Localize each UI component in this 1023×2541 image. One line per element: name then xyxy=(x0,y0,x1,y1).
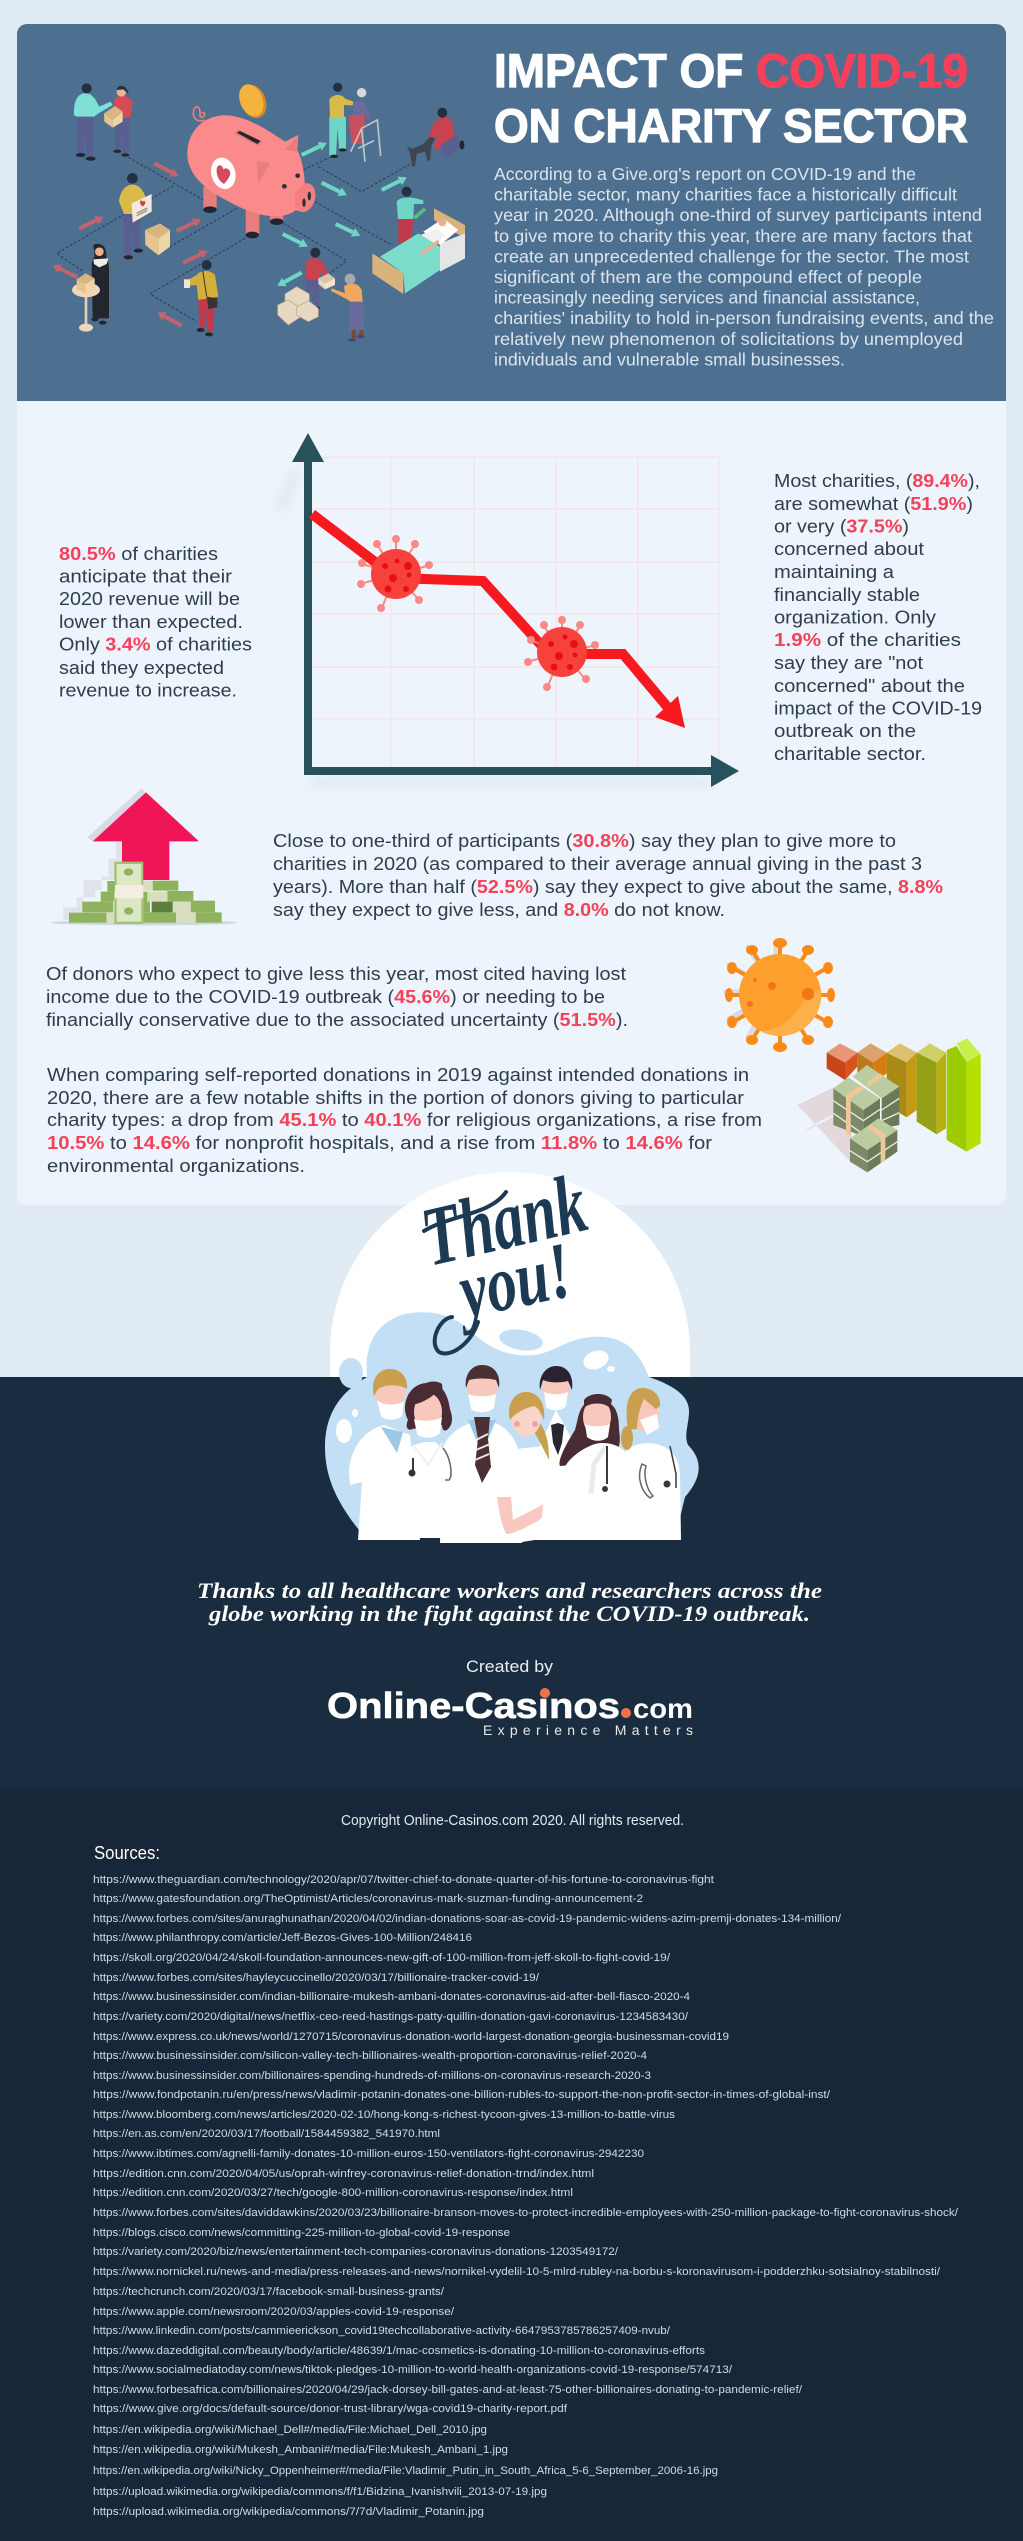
text block: intro: According to a Give.org's report on COVID-19 and the xyxy=(494,164,916,184)
text block: intro: year in 2020. Although one-third of survey participants intend xyxy=(494,205,982,225)
panel: thanks footer xyxy=(0,1157,1023,1787)
icon: virus xyxy=(525,617,598,690)
text block: revenue expectation: Only 3.4% of charities xyxy=(59,635,252,655)
text block: concern: financially stable xyxy=(774,585,920,605)
arrows: teal xyxy=(283,146,400,282)
icon: virus xyxy=(358,536,432,611)
person: nun with donation box xyxy=(72,244,109,332)
text block: charity types: environmental organizations. xyxy=(47,1156,305,1176)
text block: concern: are somewhat ( 51.9% ) xyxy=(774,494,973,514)
text block: reasons for giving less: financially conservative due to the associated uncertainty ( 51.5% ). xyxy=(46,1010,628,1030)
text block: concern: charitable sector. xyxy=(774,744,926,764)
list: source links: https://www.dazeddigital.com/beauty/body/article/48639/1/mac-cosmetics-is-donating-10-million-to-coronavirus-efforts xyxy=(93,2345,705,2357)
icon: money pile with up arrow xyxy=(51,788,238,925)
logo: Online-Casinos.com: Experience Matters xyxy=(483,1722,693,1738)
icon: piggy bank xyxy=(187,107,318,238)
text block: giving plans: charities in 2020 (as compared to their average annual giving in the past 3 xyxy=(273,854,922,874)
logo: Online-Casinos.com: com xyxy=(633,1693,693,1724)
list: source links: https://www.linkedin.com/posts/cammieerickson_covid19techcollaborative-activity-6647953785786257409-nvub/ xyxy=(93,2325,671,2337)
panel: header xyxy=(17,24,1006,401)
text block: thanks message xyxy=(197,1578,822,1626)
list: source links: https://blogs.cisco.com/news/committing-225-million-to-global-covid-19-response xyxy=(93,2227,510,2239)
doctor 2 xyxy=(384,1381,455,1538)
doctor 1 xyxy=(349,1369,420,1540)
lettering: thank you: you! xyxy=(445,1226,579,1337)
list: source links: https://www.businessinsider.com/indian-billionaire-mukesh-ambani-donates-coronavirus-aid-after-bell-fiasco-2020-4 xyxy=(93,1991,690,2003)
list: source links: https://www.theguardian.com/technology/2020/apr/07/twitter-chief-to-donate-quarter-of-his-fortune-to-coronavirus-fight xyxy=(93,1874,715,1886)
list: source links: https://www.bloomberg.com/news/articles/2020-02-10/hong-kong-s-richest-tycoon-gives-13-million-to-battle-virus xyxy=(93,2109,675,2121)
text: created by: Created by xyxy=(466,1657,554,1676)
text block: concern: organization. Only xyxy=(774,608,936,628)
text block: revenue expectation: lower than expected. xyxy=(59,612,243,632)
text block: intro: relatively new phenomenon of solicitations by unemployed xyxy=(494,329,963,349)
text block: charity types xyxy=(47,1065,762,1176)
person: volunteer in red trousers xyxy=(184,260,218,336)
panel: sources footer xyxy=(0,1787,1023,2541)
text block: reasons for giving less: income due to the COVID-19 outbreak ( 45.6% ) or needing to be xyxy=(46,987,605,1007)
title: ON CHARITY SECTOR xyxy=(494,99,968,152)
lettering: thank you xyxy=(413,1157,595,1353)
doctor 4 xyxy=(486,1392,563,1542)
text block: concern: concerned" about the xyxy=(774,676,965,696)
list: source links: https://www.nornickel.ru/news-and-media/press-releases-and-news/nornikel-vydelil-10-5-mlrd-rubley-na-borbu-s-koronavirusom-i-podderzhku-sotsialnoy-stabilnosti/ xyxy=(93,2266,941,2278)
panel: findings xyxy=(17,401,1006,1205)
text block: concern: impact of the COVID-19 xyxy=(774,699,982,719)
text block: charity types: When comparing self-reported donations in 2019 against intended donations in xyxy=(47,1065,749,1085)
person: two figures with box xyxy=(74,83,133,161)
logo: Online-Casinos.com: Online-Casinos xyxy=(327,1685,620,1726)
doctor 3 xyxy=(440,1365,522,1543)
text block: revenue expectation xyxy=(59,544,252,701)
list: source links: https://www.businessinsider.com/billionaires-spending-hundreds-of-millions-on-coronavirus-research-2020-3 xyxy=(93,2070,651,2082)
icon: coin xyxy=(235,81,271,122)
illustration: doctors xyxy=(325,1312,699,1543)
list: source links: https://www.gatesfoundation.org/TheOptimist/Articles/coronavirus-mark-suzman-funding-announcement-2 xyxy=(93,1893,643,1905)
illustration: piggy bank charity network xyxy=(57,81,465,342)
list: source links: https://en.wikipedia.org/wiki/Michael_Dell#/media/File:Michael_Dell_2010.jpg xyxy=(93,2424,487,2436)
title: IMPACT OF COVID-19 xyxy=(494,44,968,97)
text: copyright: Copyright Online-Casinos.com 2020. All rights reserved. xyxy=(341,1812,684,1829)
title xyxy=(494,44,968,152)
text block: revenue expectation: revenue to increase. xyxy=(59,681,237,701)
text block: concern: maintaining a xyxy=(774,562,895,582)
stack of cash: back xyxy=(853,1065,899,1128)
lettering: thank you: Thank xyxy=(413,1157,595,1285)
text block: concern: concerned about xyxy=(774,539,924,559)
text block: intro: create an unprecedented challenge for the sector. The most xyxy=(494,246,969,266)
axes xyxy=(292,433,739,787)
trend arrow xyxy=(312,514,685,728)
text block: intro: to give more to charity this year, there are many factors that xyxy=(494,226,972,246)
text block: intro: significant of them are the compound effect of people xyxy=(494,267,922,287)
text block: charity types: 10.5% to 14.6% for nonprofit hospitals, and a rise from 11.8% to 14.6% for xyxy=(47,1133,712,1153)
arrows: pink xyxy=(60,163,201,326)
text block: concern xyxy=(774,471,982,764)
text block: charity types: charity types: a drop from 45.1% to 40.1% for religious organizations, a rise from xyxy=(47,1110,762,1130)
icon: hospital bed with patient and nurse xyxy=(372,187,465,294)
list: source links: https://www.forbes.com/sites/daviddawkins/2020/03/23/billionaire-branson-moves-to-protect-incredible-employees-with-250-million-package-to-fight-coronavirus-shock/ xyxy=(93,2207,959,2219)
text block: concern: 1.9% of the charities xyxy=(774,630,961,650)
text block: intro xyxy=(494,164,994,369)
text block: concern: Most charities, ( 89.4% ), xyxy=(774,471,980,491)
list: source links: https://upload.wikimedia.org/wikipedia/commons/7/7d/Vladimir_Potanin.jpg xyxy=(93,2506,484,2518)
list: source links: https://www.forbes.com/sites/anuraghunathan/2020/04/02/indian-donations-soar-as-covid-19-pandemic-widens-azim-premji-donates-134-million/ xyxy=(93,1913,842,1925)
heading: sources: Sources: xyxy=(94,1843,160,1863)
list: source links: https://www.give.org/docs/default-source/donor-trust-library/wga-covid19-charity-report.pdf xyxy=(93,2403,568,2415)
text block: intro: charitable sector, many charities face a historically difficult xyxy=(494,185,957,205)
list: source links: https://www.fondpotanin.ru/en/press/news/vladimir-potanin-donates-one-billion-rubles-to-support-the-non-profit-sector-in-times-of-global-inst/ xyxy=(93,2089,831,2101)
person: carer with elderly woman and walker xyxy=(329,83,381,162)
list: source links: https://upload.wikimedia.org/wikipedia/commons/f/f1/Bidzina_Ivanishvili_2013-07-19.jpg xyxy=(93,2486,547,2498)
doctor 5 xyxy=(535,1366,585,1540)
logo: Online-Casinos.com xyxy=(327,1685,693,1738)
white circle backdrop xyxy=(330,1172,690,1377)
list: source links: https://techcrunch.com/2020/03/17/facebook-small-business-grants/ xyxy=(93,2286,445,2298)
list: source links: https://www.forbes.com/sites/hayleycuccinello/2020/03/17/billionaire-tracker-covid-19/ xyxy=(93,1972,540,1984)
person: volunteer with dog xyxy=(407,108,464,167)
text block: revenue expectation: 80.5% of charities xyxy=(59,544,218,564)
text block: reasons for giving less: Of donors who expect to give less this year, most cited having lost xyxy=(46,964,626,984)
text block: reasons for giving less xyxy=(46,964,628,1030)
text block: giving plans: years). More than half ( 52.5% ) say they expect to give about the same, 8.8% xyxy=(273,877,943,897)
stack of cash: middle xyxy=(833,1077,880,1137)
icon: bars with stacks of cash xyxy=(797,1038,981,1172)
doctor 6 xyxy=(559,1394,637,1540)
list: source links: https://www.businessinsider.com/silicon-valley-tech-billionaires-wealth-proportion-coronavirus-relief-2020-4 xyxy=(93,2050,647,2062)
doctor 7 xyxy=(621,1388,681,1540)
list: source links: https://variety.com/2020/digital/news/netflix-ceo-reed-hastings-patty-quillin-donation-gavi-coronavirus-1234583430/ xyxy=(93,2011,689,2023)
list: source links: https://edition.cnn.com/2020/04/05/us/oprah-winfrey-coronavirus-relief-donation-trnd/index.html xyxy=(93,2168,594,2180)
icon: orange virus xyxy=(725,938,835,1052)
text block: concern: outbreak on the xyxy=(774,721,916,741)
list: source links: https://www.philanthropy.com/article/Jeff-Bezos-Gives-100-Million/248416 xyxy=(93,1932,472,1944)
list: source links: https://www.apple.com/newsroom/2020/03/apples-covid-19-response/ xyxy=(93,2306,455,2318)
text block: giving plans: say they expect to give less, and 8.0% do not know. xyxy=(273,900,725,920)
text block: intro: individuals and vulnerable small businesses. xyxy=(494,349,845,369)
list: source links: https://en.wikipedia.org/wiki/Nicky_Oppenheimer#/media/File:Vladimir_Putin_in_South_Africa_5-6_September_2006-16.jpg xyxy=(93,2465,718,2477)
text block: concern: or very ( 37.5% ) xyxy=(774,517,909,537)
text block: charity types: 2020, there are a few notable shifts in the portion of donors giving to particular xyxy=(47,1088,744,1108)
text block: giving plans xyxy=(273,831,943,920)
text block: thanks message: Thanks to all healthcare workers and researchers across the xyxy=(197,1578,822,1603)
text block: concern: say they are "not xyxy=(774,653,923,673)
text block: giving plans: Close to one-third of participants ( 30.8% ) say they plan to give more to xyxy=(273,831,896,851)
text block: revenue expectation: 2020 revenue will be xyxy=(59,589,240,609)
text block: revenue expectation: anticipate that their xyxy=(59,567,232,587)
person: volunteer with sign and box xyxy=(119,173,170,259)
list: source links: https://www.express.co.uk/news/world/1270715/coronavirus-donation-world-largest-donation-georgia-businessman-covid19 xyxy=(93,2031,729,2043)
list: source links: https://edition.cnn.com/2020/03/27/tech/google-800-million-coronavirus-response/index.html xyxy=(93,2187,573,2199)
text block: revenue expectation: said they expected xyxy=(59,658,224,678)
text block: intro: increasingly needing services and financial assistance, xyxy=(494,288,920,308)
list: source links xyxy=(93,1874,959,2518)
list: source links: https://en.as.com/en/2020/03/17/football/1584459382_541970.html xyxy=(93,2128,440,2140)
list: source links: https://www.socialmediatoday.com/news/tiktok-pledges-10-million-to-world-health-organizations-covid-19-response/574713/ xyxy=(93,2364,733,2376)
list: source links: https://skoll.org/2020/04/24/skoll-foundation-announces-new-gift-of-100-million-from-jeff-skoll-to-fight-covid-19/ xyxy=(93,1952,671,1964)
text block: thanks message: globe working in the fight against the COVID-19 outbreak. xyxy=(208,1601,810,1626)
person: helpers with boxes xyxy=(278,248,365,342)
list: source links: https://www.forbesafrica.com/billionaires/2020/04/29/jack-dorsey-bill-gates-and-at-least-75-other-billionaires-donating-to-pandemic-relief/ xyxy=(93,2384,803,2396)
stack of cash: front xyxy=(850,1118,897,1172)
list: source links: https://en.wikipedia.org/wiki/Mukesh_Ambani#/media/File:Mukesh_Ambani_1.jpg xyxy=(93,2444,508,2456)
list: source links: https://variety.com/2020/biz/news/entertainment-tech-companies-coronavirus-donations-1203549172/ xyxy=(93,2246,619,2258)
text block: intro: charities' inability to hold in-person fundraising events, and the xyxy=(494,308,994,328)
chart: falling revenue line xyxy=(280,433,739,787)
list: source links: https://www.ibtimes.com/agnelli-family-donates-10-million-euros-150-ventilators-fight-coronavirus-2942230 xyxy=(93,2148,644,2160)
